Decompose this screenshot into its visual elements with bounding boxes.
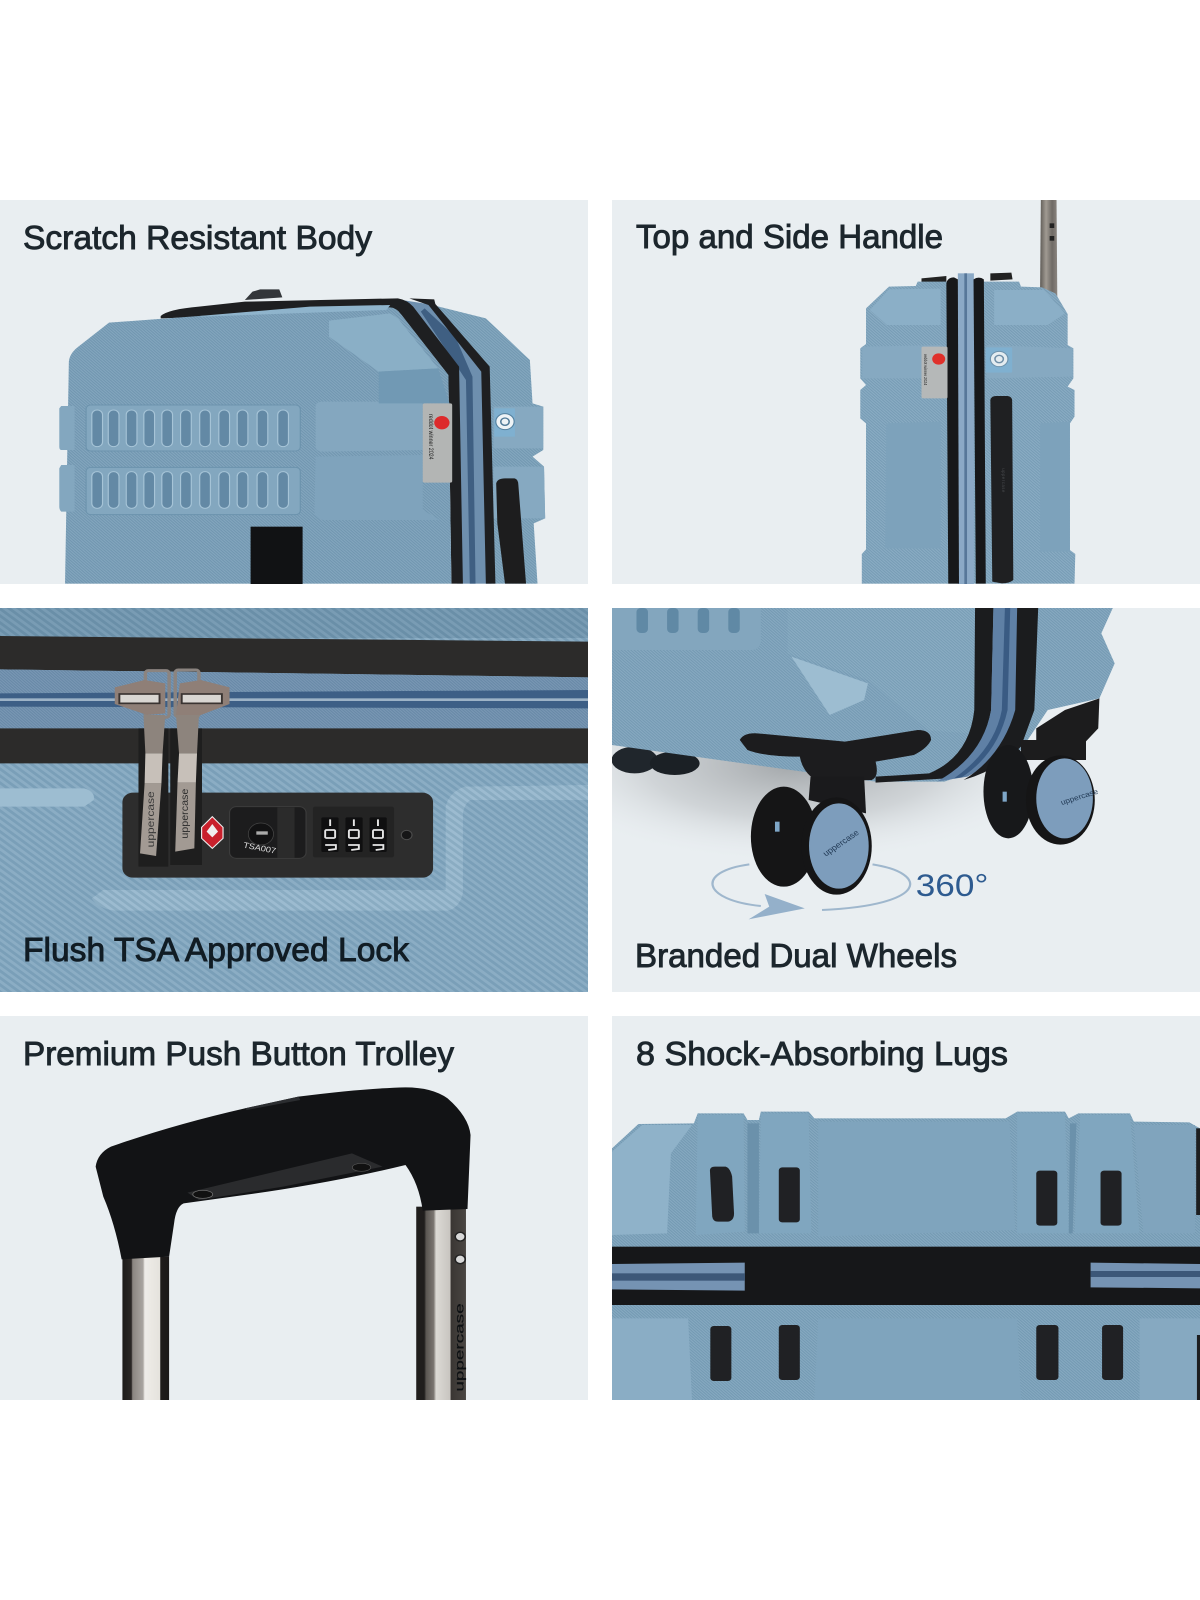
heading: scratch resistant body: Scratch Resistant Body: [23, 219, 372, 256]
360 degree label: 360°: [916, 868, 988, 903]
suitcase lugs close-up: [612, 1016, 1200, 1400]
heading: premium push button trolley: Premium Push Button Trolley: [23, 1035, 455, 1072]
panel: premium push button trolley: [0, 1016, 588, 1400]
heading: flush TSA approved lock: Flush TSA Approved Lock: [23, 931, 409, 968]
zipper pull: left: uppercase: [146, 791, 157, 847]
heading: shock-absorbing lugs: 8 Shock-Absorbing Lugs: [636, 1035, 1008, 1072]
wheels close-up: [612, 608, 1200, 992]
heading: top and side handle: Top and Side Handle: [636, 218, 943, 255]
rear wheel: uppercase: [1059, 787, 1100, 807]
heading: branded dual wheels: Branded Dual Wheels: [635, 937, 957, 974]
TSA diamond icon: [202, 817, 223, 848]
panel: shock-absorbing lugs: [612, 1016, 1200, 1400]
front wheel: uppercase: [821, 828, 861, 858]
rear wheel: [983, 740, 1100, 845]
suitcase side view: uppercase: [1001, 468, 1006, 493]
trolley handle: uppercase: [454, 1303, 467, 1392]
suitcase side view: [612, 200, 1200, 584]
zipper pull: right: uppercase: [180, 789, 191, 839]
lock close-up: [0, 608, 588, 992]
panel: branded dual wheels: [612, 608, 1200, 992]
lugs: [710, 1167, 1123, 1381]
front wheel: [751, 787, 872, 895]
suitcase body close-up: [0, 200, 588, 584]
suitcase body close-up: reddot winner 2024: [427, 414, 434, 460]
panel: flush TSA approved lock: [0, 608, 588, 992]
TSA key dial: [230, 807, 306, 858]
rotation arrow: [713, 864, 910, 919]
zipper pull: left: [115, 671, 169, 856]
trolley handle: [0, 1016, 588, 1400]
panel: scratch resistant body: [0, 200, 588, 584]
panel: top and side handle: [612, 200, 1200, 584]
combination wheels: [313, 807, 394, 857]
left pole: [122, 1257, 169, 1400]
suitcase side view: reddot winner 2024: [923, 354, 928, 386]
zipper pull: right: [175, 670, 230, 852]
right pole: [416, 1207, 466, 1400]
TSA key dial: TSA007: [242, 840, 277, 855]
handle grip: [96, 1087, 471, 1259]
